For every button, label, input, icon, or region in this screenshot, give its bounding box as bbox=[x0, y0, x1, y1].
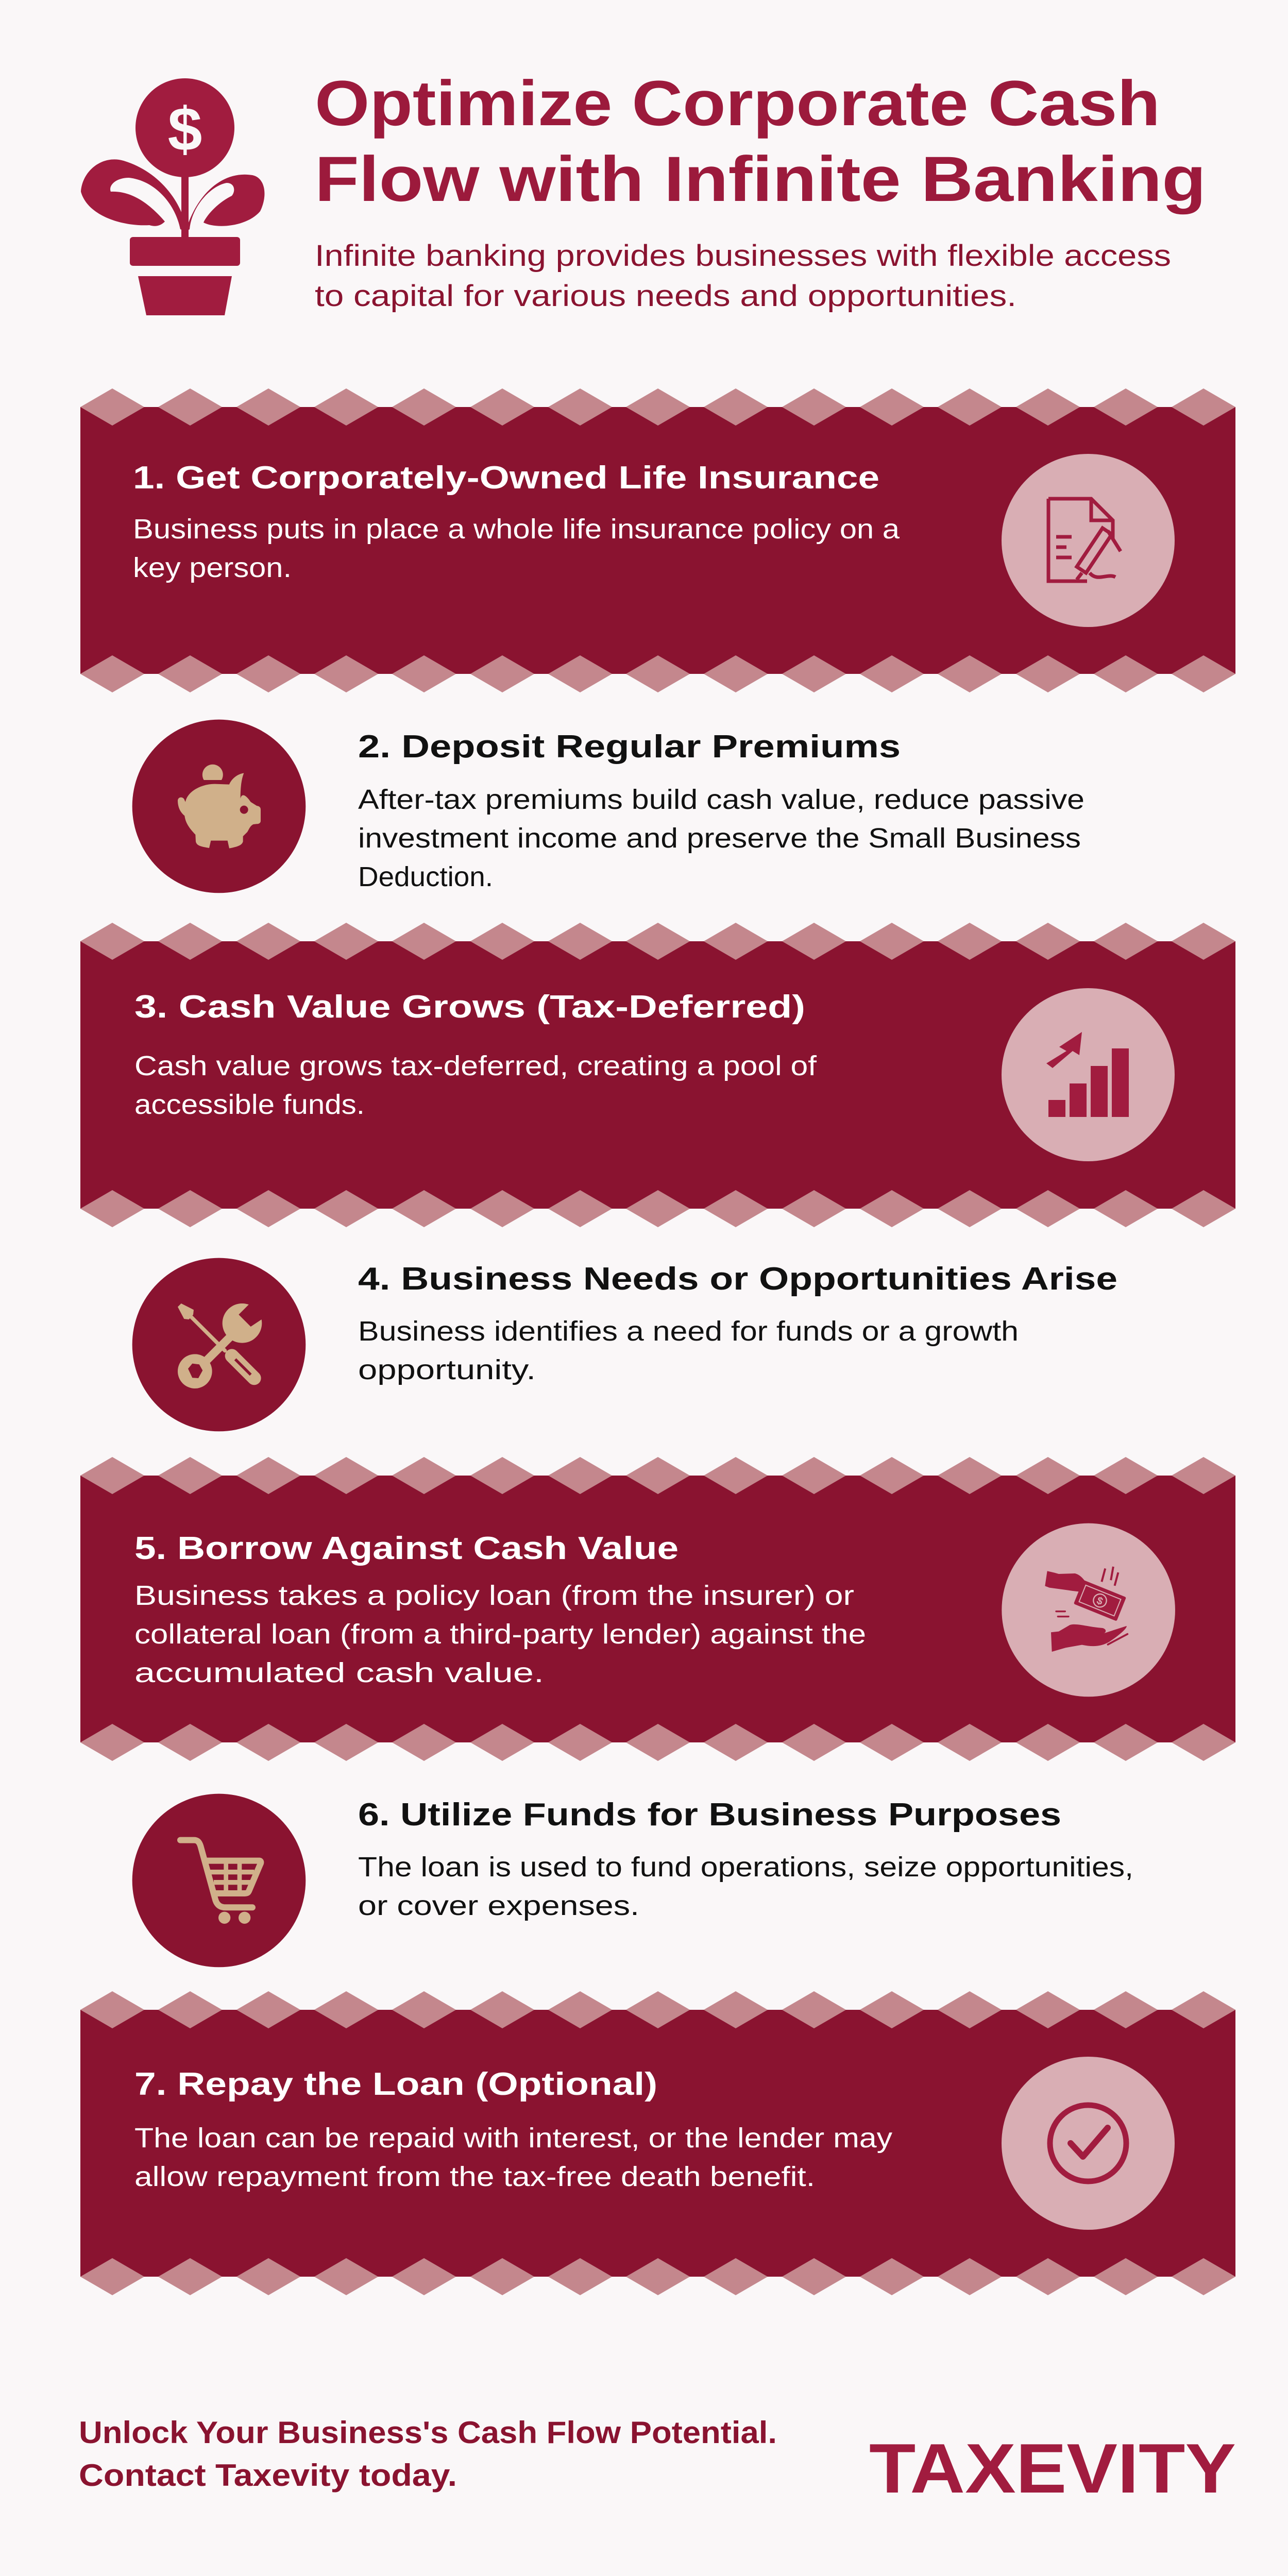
body: step 6: or cover expenses. bbox=[358, 1890, 639, 1921]
heading: step 7: 7. Repay the Loan (Optional) bbox=[134, 2066, 657, 2102]
row: step 2 bbox=[132, 720, 1084, 893]
panel: step 7 bbox=[80, 1991, 1235, 2295]
panel: step 5 bbox=[80, 1457, 1235, 1761]
row: step 4 bbox=[132, 1258, 1117, 1431]
body: step 2 bbox=[358, 784, 1084, 892]
body: step 7: The loan can be repaid with interest, or the lender may bbox=[134, 2123, 892, 2154]
subtitle bbox=[315, 239, 1171, 313]
panel: step 1 bbox=[80, 388, 1235, 692]
body: step 5: collateral loan (from a third-party lender) against the bbox=[134, 1619, 866, 1650]
icon: money plant: $ bbox=[168, 95, 202, 164]
body: step 1: key person. bbox=[133, 552, 292, 583]
row: step 6 bbox=[132, 1794, 1133, 1967]
subtitle: Infinite banking provides businesses with flexible access bbox=[315, 239, 1171, 273]
heading: step 1: 1. Get Corporately-Owned Life Insurance bbox=[133, 460, 879, 496]
logo: Taxevity: TAXEVITY bbox=[869, 2429, 1236, 2507]
body: step 4 bbox=[358, 1316, 1019, 1385]
icon: check circle bbox=[1002, 2057, 1175, 2230]
title: Flow with Infinite Banking bbox=[315, 144, 1206, 215]
body: step 4: opportunity. bbox=[358, 1354, 536, 1385]
icon: tools bbox=[132, 1258, 306, 1431]
body: step 7: allow repayment from the tax-free death benefit. bbox=[134, 2161, 815, 2192]
body: step 5 bbox=[134, 1580, 866, 1688]
panel: step 3 bbox=[80, 923, 1235, 1227]
footer call to action: Unlock Your Business's Cash Flow Potential. bbox=[79, 2415, 777, 2450]
body: step 4: Business identifies a need for funds or a growth bbox=[358, 1316, 1019, 1347]
body: step 6 bbox=[358, 1852, 1133, 1921]
heading: step 4: 4. Business Needs or Opportunities Arise bbox=[358, 1261, 1117, 1297]
icon: piggy bank bbox=[132, 720, 306, 893]
body: step 5: accumulated cash value. bbox=[134, 1657, 544, 1688]
footer call to action: Contact Taxevity today. bbox=[79, 2458, 457, 2493]
body: step 1: Business puts in place a whole life insurance policy on a bbox=[133, 514, 900, 545]
body: step 6: The loan is used to fund operations, seize opportunities, bbox=[358, 1852, 1133, 1883]
body: step 2: After-tax premiums build cash value, reduce passive bbox=[358, 784, 1084, 815]
body: step 5: Business takes a policy loan (from the insurer) or bbox=[134, 1580, 854, 1611]
heading: step 2: 2. Deposit Regular Premiums bbox=[358, 729, 901, 765]
body: step 2: investment income and preserve the Small Business bbox=[358, 823, 1081, 854]
title: Optimize Corporate Cash bbox=[315, 68, 1160, 139]
subtitle: to capital for various needs and opportunities. bbox=[315, 279, 1016, 313]
icon: money plant bbox=[81, 78, 264, 315]
icon: signing document bbox=[1002, 454, 1175, 627]
icon: shopping cart bbox=[132, 1794, 306, 1967]
body: step 3: accessible funds. bbox=[134, 1089, 365, 1120]
body: step 3 bbox=[134, 1050, 817, 1120]
body: step 1 bbox=[133, 514, 900, 583]
icon: money in hand: $ bbox=[1095, 1595, 1105, 1607]
icon: growth chart bbox=[1002, 988, 1175, 1161]
body: step 3: Cash value grows tax-deferred, creating a pool of bbox=[134, 1050, 817, 1081]
title bbox=[315, 68, 1206, 215]
heading: step 3: 3. Cash Value Grows (Tax-Deferred) bbox=[134, 989, 805, 1025]
body: step 7 bbox=[134, 2123, 892, 2192]
footer call to action bbox=[79, 2415, 777, 2493]
heading: step 5: 5. Borrow Against Cash Value bbox=[134, 1531, 679, 1566]
icon: money in hand bbox=[1002, 1523, 1175, 1697]
heading: step 6: 6. Utilize Funds for Business Purposes bbox=[358, 1797, 1061, 1833]
body: step 2: Deduction. bbox=[358, 861, 493, 892]
